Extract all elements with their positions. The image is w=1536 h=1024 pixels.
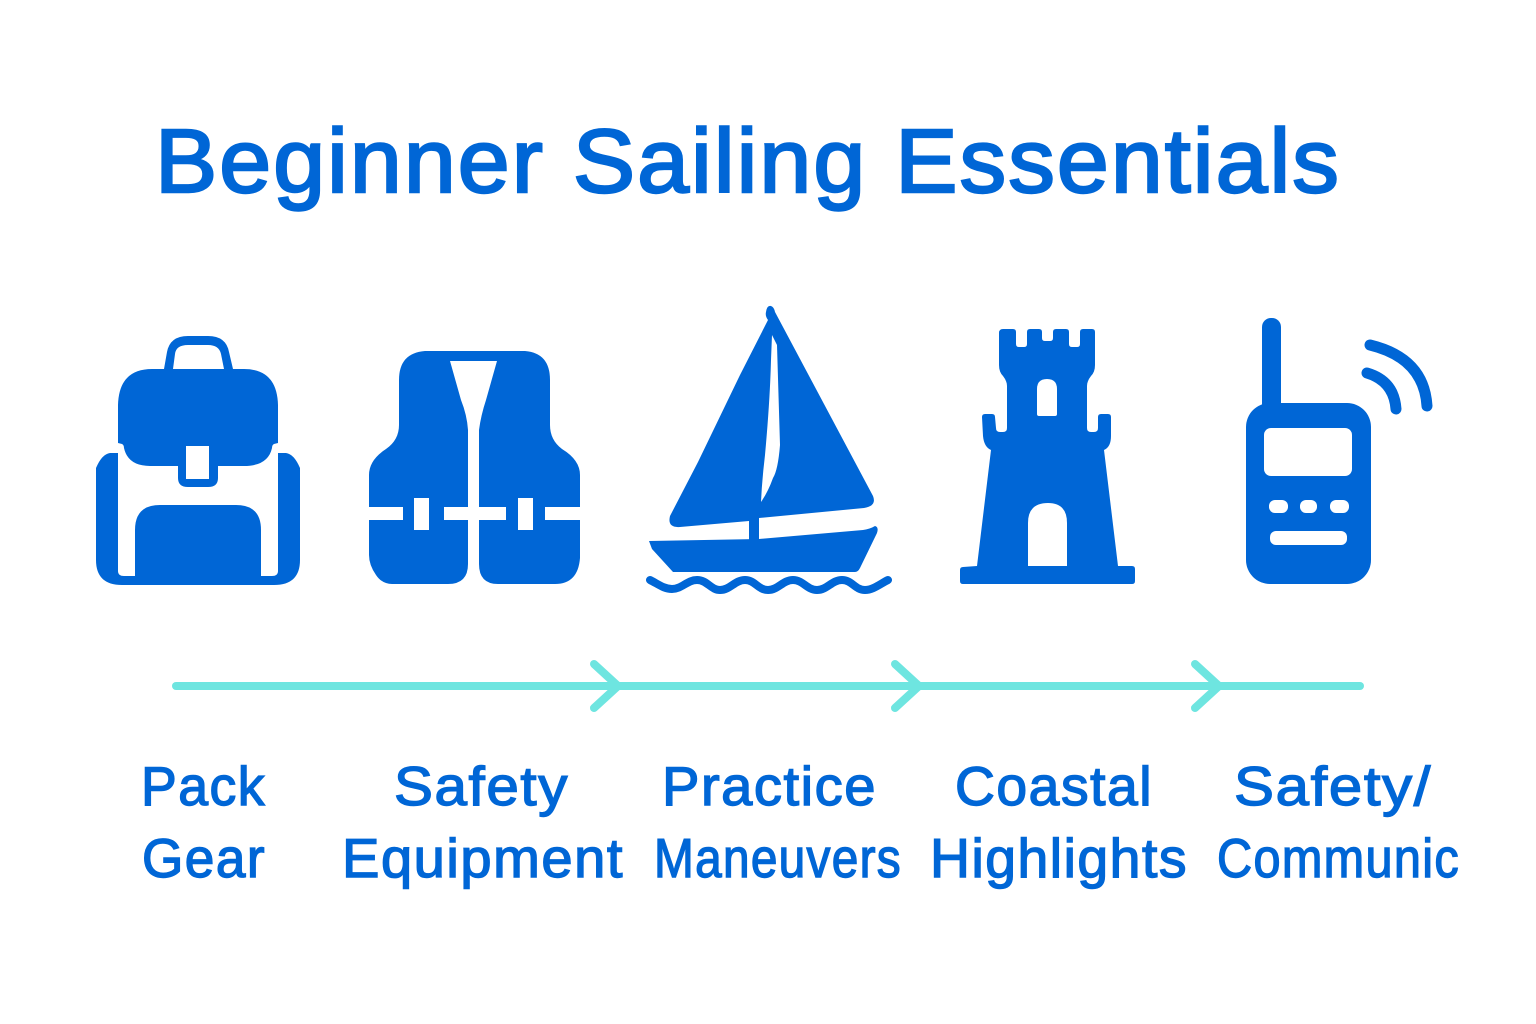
label: safety communication [1217, 755, 1460, 889]
icon: coastal tower [960, 329, 1135, 584]
label: safety equipment [342, 755, 624, 889]
icon: life vest [369, 351, 580, 584]
label: safety equipment: Equipment [342, 827, 624, 889]
label: safety communication: Communic [1217, 827, 1460, 889]
label: coastal highlights: Coastal [955, 755, 1153, 817]
icon: walkie-talkie radio [1246, 318, 1427, 584]
icon: sailboat [649, 306, 888, 590]
label: safety communication: Safety/ [1234, 755, 1432, 817]
label: pack gear: Gear [142, 827, 266, 889]
label: pack gear: Pack [141, 755, 266, 817]
label: practice maneuvers [654, 755, 902, 889]
icon: backpack [96, 336, 300, 585]
label: practice maneuvers: Practice [662, 755, 877, 817]
label: safety equipment: Safety [394, 755, 569, 817]
label: coastal highlights: Highlights [930, 827, 1188, 889]
arrow timeline [176, 664, 1360, 708]
label: coastal highlights [930, 755, 1188, 889]
label: pack gear [141, 755, 266, 889]
title: Beginner Sailing Essentials [155, 112, 1341, 212]
label: practice maneuvers: Maneuvers [654, 827, 902, 889]
